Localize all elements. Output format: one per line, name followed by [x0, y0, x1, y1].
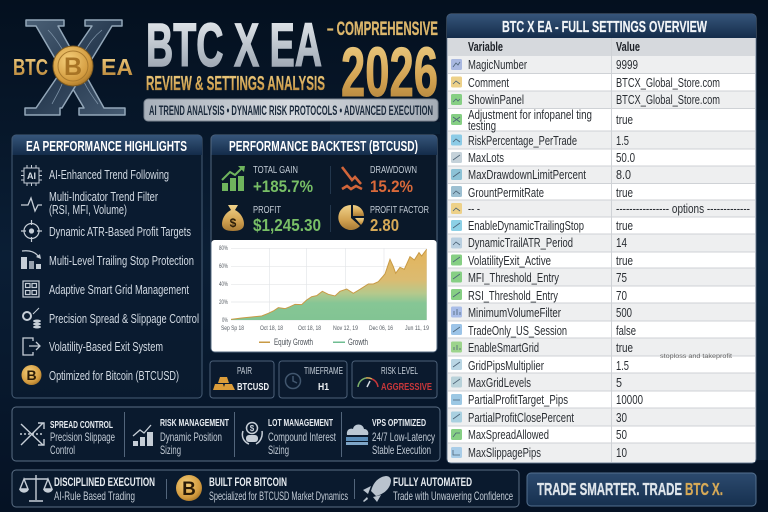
call to action: TRADE SMARTER. TRADE — [537, 479, 682, 499]
variable names: TradeOnly_US_Session — [468, 323, 567, 338]
feature: lot management — [268, 417, 336, 457]
subtitle: comprehensive: – COMPREHENSIVE — [327, 19, 438, 40]
variable names: -- - — [468, 201, 480, 216]
panel heading — [12, 135, 202, 155]
box: risk level: AGGRESSIVE — [381, 381, 432, 393]
icon: pie chart — [338, 205, 364, 230]
values: 1.5 — [616, 133, 629, 148]
tagline pill: AI TREND ANALYSIS • DYNAMIC RISK PROTOCOLS • ADVANCED EXECUTION — [149, 103, 433, 118]
feature: spread control: Precision Slippage — [50, 430, 115, 444]
box: timeframe: TIMEFRAME — [304, 365, 343, 377]
area series — [231, 249, 427, 320]
y axis labels: 40% — [219, 281, 228, 288]
icon: risk bars — [133, 425, 153, 446]
values: 10 — [616, 445, 627, 460]
values: 500 — [616, 305, 632, 320]
variable names: MaxSlippagePips — [468, 445, 541, 460]
metric: profit: PROFIT — [253, 204, 281, 216]
feature: VPS optimized — [372, 417, 435, 457]
feature: spread control: Control — [50, 443, 75, 457]
y axis labels: 80% — [219, 245, 228, 252]
year 2026: 2026 — [341, 33, 438, 111]
metric: profit — [222, 204, 321, 235]
logo text left: BTC — [13, 54, 48, 80]
icon: grid — [23, 281, 39, 297]
variable names: VolatilityExit_Active — [468, 253, 551, 268]
feature: built for bitcoin: BUILT FOR BITCOIN — [209, 475, 287, 489]
bottom strip — [12, 470, 519, 507]
y axis labels: 60% — [219, 263, 228, 270]
values: true — [616, 112, 633, 127]
title: BTC X EA — [146, 11, 322, 79]
icon: money bag: $ — [230, 216, 237, 230]
values: 50 — [616, 427, 627, 442]
row icons — [451, 59, 462, 458]
box: pair: PAIR — [237, 365, 252, 377]
values: 14 — [616, 235, 627, 250]
x axis labels: Oct 18, 18 — [298, 325, 321, 332]
panel: performance backtest — [211, 135, 437, 352]
x axis labels: Nov 12, 19 — [333, 325, 358, 332]
variable names — [468, 57, 592, 460]
item: spread control: Precision Spread & Slippage Control — [49, 311, 199, 326]
icon: clock — [286, 374, 300, 388]
icon: falling arrow — [342, 167, 362, 189]
table column header: Value — [616, 39, 640, 54]
values: 70 — [616, 288, 627, 303]
annotation: stoploss and takeprofit: stoploss and takeprofit — [660, 353, 732, 360]
feature: VPS optimized: 24/7 Low-Latency — [372, 430, 435, 444]
metric: drawdown: DRAWDOWN — [370, 164, 417, 176]
variable names: DynamicTrailATR_Period — [468, 235, 573, 250]
feature: risk management: Sizing — [160, 443, 181, 457]
icon: scales — [20, 475, 52, 501]
item: volatility exit: Volatility-Based Exit System — [49, 339, 163, 354]
icon: bitcoin coin — [176, 475, 202, 501]
feature strip — [12, 407, 440, 461]
values: true — [616, 218, 633, 233]
feature: lot management: LOT MANAGEMENT — [268, 417, 333, 429]
subtitle: review: REVIEW & SETTINGS ANALYSIS — [146, 73, 325, 95]
feature: fully automated: Trade with Unwavering Confidence — [393, 489, 513, 503]
variable names: GridPipsMultiplier — [468, 358, 544, 373]
x axis labels: Sep Sp 18 — [221, 325, 244, 332]
feature: disciplined execution: AI-Rule Based Trading — [54, 489, 135, 503]
box: risk level — [352, 361, 437, 398]
panel: EA performance highlights — [12, 135, 202, 398]
variable names: EnableDynamicTrailingStop — [468, 218, 584, 233]
panel: settings table — [447, 14, 756, 463]
y axis labels: 20% — [219, 299, 228, 306]
item: AI trend: AI-Enhanced Trend Following — [49, 167, 169, 182]
feature: spread control — [50, 419, 115, 457]
icon: compound coin — [242, 422, 262, 444]
tagline pill — [144, 99, 438, 121]
line chart: equity growth — [212, 240, 436, 352]
panel heading: PERFORMANCE BACKTEST (BTCUSD) — [229, 139, 418, 155]
variable names: MagicNumber — [468, 57, 527, 72]
icon: gold bars — [213, 377, 235, 390]
values: 8.0 — [616, 167, 631, 182]
x axis labels: Oct 18, 18 — [260, 325, 283, 332]
values: true — [616, 185, 633, 200]
variable names: EnableSmartGrid — [468, 340, 539, 355]
variable names: MinimumVolumeFilter — [468, 305, 561, 320]
variable names: Comment — [468, 75, 509, 90]
item: multi-indicator — [49, 189, 158, 217]
variable names: ShowinPanel — [468, 92, 524, 107]
variable names: MaxDrawdownLimitPercent — [468, 167, 586, 182]
panel heading — [212, 135, 437, 155]
feature: disciplined execution: DISCIPLINED EXECUTION — [54, 475, 155, 489]
x axis labels: Jun 11, 19 — [405, 325, 429, 332]
x axis labels: Dec 06, 16 — [369, 325, 393, 332]
item: trailing stop: Multi-Level Trailing Stop Protection — [49, 253, 194, 268]
logo: BTC X EA — [13, 20, 133, 115]
box: risk level: RISK LEVEL — [381, 365, 418, 377]
box: pair — [210, 361, 274, 398]
icon: compound coin: $ — [250, 424, 255, 433]
feature: spread control: SPREAD CONTROL — [50, 419, 113, 431]
variable names: PartialProfitClosePercent — [468, 410, 574, 425]
item: ATR targets: Dynamic ATR-Based Profit Targets — [49, 224, 191, 239]
icon: growth bars — [222, 166, 245, 191]
icon: steel X — [25, 20, 125, 115]
metric: drawdown: 15.2% — [370, 177, 413, 196]
icon: bitcoin coin: B — [182, 479, 196, 500]
variable names: MFI_Threshold_Entry — [468, 270, 559, 285]
values — [616, 57, 750, 460]
feature: lot management: Compound Interest — [268, 430, 336, 444]
box: timeframe: H1 — [318, 381, 329, 393]
icon: trailing stop bars — [21, 251, 41, 269]
legend: Growth — [348, 337, 368, 348]
feature: risk management — [160, 417, 229, 457]
values: BTCX_Global_Store.com — [616, 75, 720, 90]
values: 1.5 — [616, 358, 629, 373]
icon: exit — [23, 338, 40, 355]
values: true — [616, 253, 633, 268]
variable names: MaxLots — [468, 150, 504, 165]
y axis labels: 0% — [222, 317, 228, 324]
icon: rocket — [363, 476, 391, 502]
x axis labels — [221, 325, 429, 332]
table row stripes — [448, 56, 755, 462]
item: multi-indicator: (RSI, MFI, Volume) — [49, 202, 127, 217]
equity line — [231, 249, 427, 319]
icon: target — [21, 220, 42, 242]
icon: AI chip: AI — [27, 171, 36, 181]
feature: VPS optimized: VPS OPTIMIZED — [372, 417, 426, 429]
variable names: RSI_Threshold_Entry — [468, 288, 558, 303]
variable names: RiskPercentage_PerTrade — [468, 133, 577, 148]
icon: spread and slippage — [23, 308, 41, 328]
variable names: testing — [468, 118, 496, 133]
call to action — [527, 473, 756, 506]
feature: built for bitcoin: Specialized for BTCUSD Market Dynamics — [209, 489, 348, 503]
icon: pulse — [21, 198, 42, 211]
icon: cloud server — [346, 424, 368, 445]
logo text right: EA — [101, 54, 133, 80]
variable names: MaxGridLevels — [468, 375, 531, 390]
values: 50.0 — [616, 150, 635, 165]
y axis labels — [219, 245, 228, 324]
metric: profit: $1,245.30 — [253, 215, 321, 235]
variable names: GrountPermitRate — [468, 185, 544, 200]
item: multi-indicator: Multi-Indicator Trend Filter — [49, 189, 158, 204]
values: 5 — [616, 375, 622, 390]
legend — [259, 337, 368, 348]
icon: AI chip — [21, 165, 42, 186]
icon: crossing arrows — [20, 423, 44, 445]
table column header: Variable — [468, 39, 503, 54]
feature: disciplined execution — [54, 475, 155, 503]
table heading — [447, 14, 756, 38]
item: smart grid: Adaptive Smart Grid Management — [49, 282, 189, 297]
values: false — [616, 323, 636, 338]
variable names: Adjustment for infopanel ting — [468, 107, 592, 122]
metric: profit factor: 2.80 — [370, 215, 399, 235]
metric: total gain: +185.7% — [253, 177, 313, 196]
icon: gauge — [358, 378, 378, 387]
feature: fully automated — [393, 475, 513, 503]
feature: risk management: RISK MANAGEMENT — [160, 417, 229, 429]
table column header — [448, 38, 755, 56]
metric: drawdown — [342, 164, 417, 196]
feature: built for bitcoin — [209, 475, 348, 503]
feature: VPS optimized: Stable Execution — [372, 443, 431, 457]
feature: lot management: Sizing — [268, 443, 289, 457]
icon: bitcoin coin: B — [64, 53, 82, 81]
variable names: PartialProfitTarget_Pips — [468, 392, 568, 407]
feature: fully automated: FULLY AUTOMATED — [393, 475, 472, 489]
icon: bitcoin: B — [26, 367, 37, 383]
metric: profit factor: PROFIT FACTOR — [370, 204, 429, 216]
values: 30 — [616, 410, 627, 425]
feature: risk management: Dynamic Position — [160, 430, 222, 444]
values: BTCX_Global_Store.com — [616, 92, 720, 107]
values: 10000 — [616, 392, 643, 407]
panel heading: EA PERFORMANCE HIGHLIGHTS — [26, 139, 187, 155]
metric: total gain — [222, 164, 313, 196]
legend: Equity Growth — [274, 337, 313, 348]
box: pair: BTCUSD — [237, 381, 269, 393]
item: optimized: Optimized for Bitcoin (BTCUSD) — [49, 368, 179, 383]
box: timeframe — [279, 361, 347, 398]
values: true — [616, 340, 633, 355]
values: 9999 — [616, 57, 638, 72]
icon: bitcoin — [22, 365, 42, 385]
metric: total gain: TOTAL GAIN — [253, 164, 298, 176]
variable names: MaxSpreadAllowed — [468, 427, 549, 442]
metric: profit factor — [338, 204, 429, 235]
values: 75 — [616, 270, 627, 285]
call to action: BTC X. — [685, 479, 723, 499]
